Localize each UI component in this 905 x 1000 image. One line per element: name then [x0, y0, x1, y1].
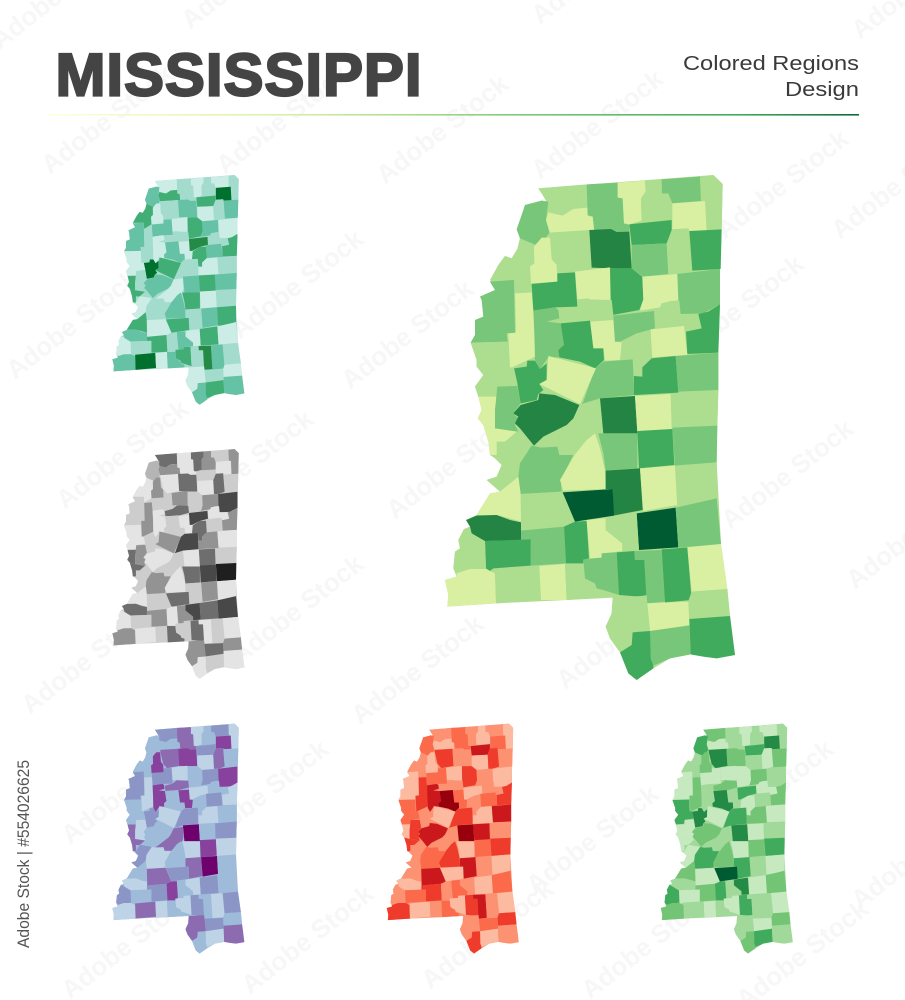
watermark background: Adobe Stock — [15, 598, 159, 720]
watermark background: Adobe Stock — [715, 413, 859, 535]
watermark background: Adobe Stock — [0, 263, 144, 385]
watermark background: Adobe Stock — [175, 403, 319, 525]
watermark background: Adobe Stock — [210, 58, 354, 180]
watermark background: Adobe Stock — [345, 608, 489, 730]
map: small blue-purple Mississippi — [112, 724, 244, 954]
watermark background: Adobe Stock — [695, 733, 839, 855]
watermark background: Adobe Stock — [50, 393, 194, 515]
watermark background: Adobe Stock — [380, 403, 524, 525]
watermark background: Adobe Stock — [335, 273, 479, 395]
watermark background: Adobe Stock — [190, 733, 334, 855]
watermark background: Adobe Stock — [520, 778, 664, 900]
title: MISSISSIPPI — [56, 42, 422, 109]
stock id side text: Adobe Stock | #554026625 — [14, 760, 33, 948]
map: large yellow-green Mississippi — [445, 175, 735, 680]
watermark background: Adobe Stock — [225, 223, 369, 345]
watermark background: Adobe Stock — [55, 728, 199, 850]
subtitle: Colored Regions — [683, 53, 859, 75]
watermark background: Adobe Stock — [665, 248, 809, 370]
map: small red Mississippi — [387, 724, 519, 954]
watermark background: Adobe Stock — [370, 68, 514, 190]
map: small gray Mississippi — [112, 449, 244, 679]
watermark background: Adobe Stock — [525, 63, 669, 185]
header rule — [47, 114, 859, 116]
watermark background: Adobe Stock — [35, 58, 179, 180]
watermark background: Adobe Stock — [235, 878, 379, 1000]
watermark background: Adobe Stock — [415, 873, 559, 995]
watermark background: Adobe Stock — [710, 123, 854, 245]
watermark background: Adobe Stock — [550, 573, 694, 695]
watermark background: Adobe Stock — [225, 548, 369, 670]
subtitle: Design — [785, 79, 859, 101]
subtitle — [683, 53, 859, 101]
map: small teal Mississippi — [112, 175, 244, 405]
map: small green Mississippi — [661, 724, 793, 954]
